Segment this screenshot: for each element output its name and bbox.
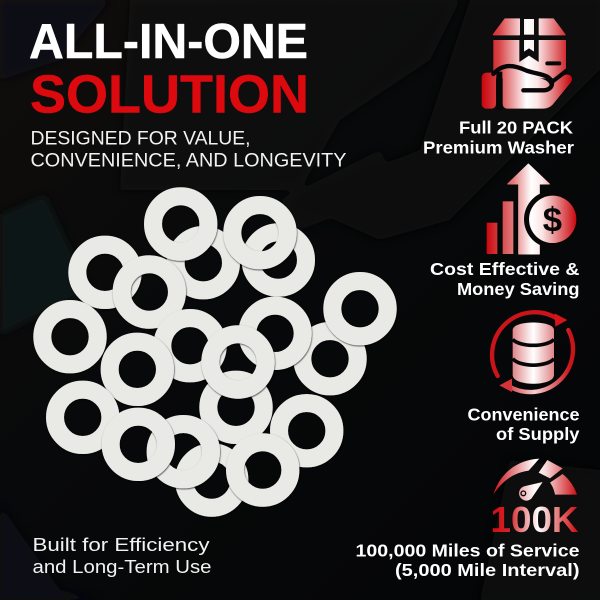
label: Full 20 PACK: Premium Washer xyxy=(423,138,574,158)
subtitle: DESIGNED FOR VALUE, xyxy=(30,128,250,150)
label: Convenience of Supply: of Supply xyxy=(496,424,580,444)
washers pile xyxy=(42,196,388,508)
label: Cost Effective: Money Saving xyxy=(457,279,580,299)
label: 100,000 Miles of Service: 100,000 Miles of Service xyxy=(356,540,580,560)
icon: rising bars, arrow and dollar coin xyxy=(487,164,581,254)
label: Cost Effective xyxy=(430,259,580,299)
label: Convenience of Supply xyxy=(468,404,580,444)
title: ALL-IN-ONE xyxy=(29,15,308,69)
label: 100,000 Miles of Service: (5,000 Mile Interval) xyxy=(395,560,580,580)
label: Full 20 PACK: Full 20 PACK xyxy=(459,118,573,138)
icon: rising bars, arrow and dollar coin: $ xyxy=(543,201,562,239)
label: Convenience of Supply: Convenience xyxy=(468,404,580,424)
bottom caption xyxy=(32,534,212,577)
label: Full 20 PACK xyxy=(423,118,574,158)
icon: box on hand xyxy=(482,19,572,110)
label: Cost Effective: Cost Effective & xyxy=(430,259,580,279)
icon: database with circular arrows xyxy=(492,312,573,392)
title: SOLUTION xyxy=(30,64,309,124)
100K figure: 100K xyxy=(490,499,579,540)
title xyxy=(29,15,309,124)
icon: speedometer 100K xyxy=(493,459,577,501)
bottom caption: and Long-Term Use xyxy=(32,556,212,577)
subtitle xyxy=(30,128,346,172)
subtitle: CONVENIENCE, AND LONGEVITY xyxy=(30,150,346,172)
bottom caption: Built for Efficiency xyxy=(32,534,210,555)
label: 100,000 Miles of Service xyxy=(356,540,580,580)
